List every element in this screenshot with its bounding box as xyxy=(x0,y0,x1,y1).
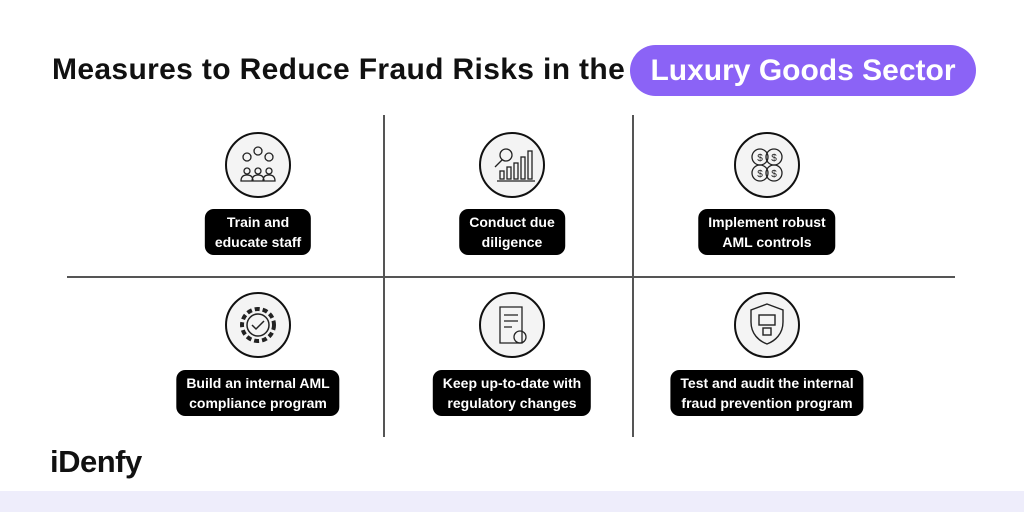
label: regulatory xyxy=(433,370,591,416)
icon: coins: $ xyxy=(757,153,763,164)
label: train: educate staff xyxy=(215,234,301,250)
title: Measures to Reduce Fraud Risks in the xyxy=(52,53,625,86)
label: train: Train and xyxy=(227,214,289,230)
logo: iDenfy xyxy=(50,444,142,479)
label: AML controls xyxy=(698,209,836,255)
icon: gear check xyxy=(225,292,291,358)
label: compliance program: compliance program xyxy=(189,395,327,411)
label: audit xyxy=(670,370,864,416)
icon: shield xyxy=(734,292,800,358)
label: regulatory: regulatory changes xyxy=(447,395,577,411)
icon: document xyxy=(479,292,545,358)
label: AML controls: AML controls xyxy=(722,234,812,250)
label: due diligence: diligence xyxy=(482,234,542,250)
label: audit: Test and audit the internal xyxy=(680,375,854,391)
icon: gears and people xyxy=(225,132,291,198)
label: due diligence: Conduct due xyxy=(469,214,555,230)
title highlight pill: Luxury Goods Sector xyxy=(650,54,956,87)
icon: due diligence chart xyxy=(479,132,545,198)
label: compliance program: Build an internal AML xyxy=(186,375,330,391)
label: regulatory: Keep up-to-date with xyxy=(443,375,581,391)
title highlight pill xyxy=(630,45,976,96)
label: audit: fraud prevention program xyxy=(681,395,853,411)
icon: coins: $ xyxy=(757,169,763,180)
label: train xyxy=(205,209,311,255)
icon: coins xyxy=(734,132,800,198)
icon: coins: $ xyxy=(771,169,777,180)
icon: coins: $ xyxy=(771,153,777,164)
label: compliance program xyxy=(176,370,340,416)
label: AML controls: Implement robust xyxy=(708,214,826,230)
label: due diligence xyxy=(459,209,565,255)
